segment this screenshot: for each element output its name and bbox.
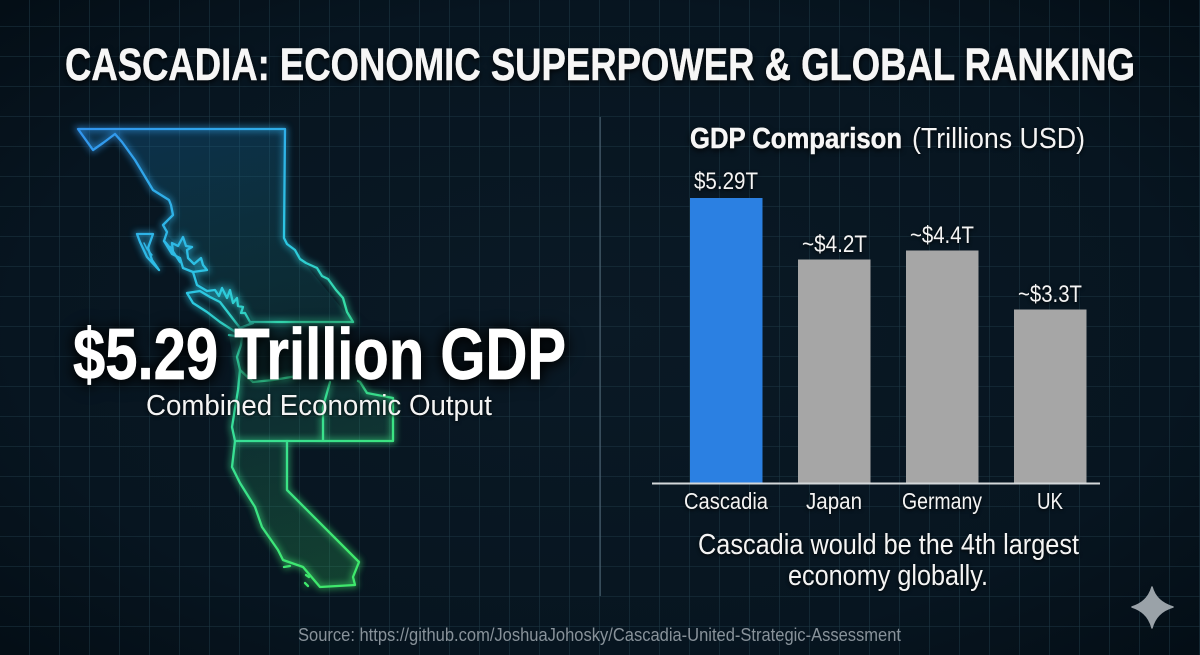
label: UK: UK [1037,488,1064,514]
divider [600,117,601,596]
chart takeaway: Cascadia would be the 4th largest [698,529,1079,561]
bar: Germany [906,250,978,483]
label: Japan: Japan [806,488,862,514]
chart heading: (Trillions USD) [912,123,1085,155]
map fill: British Columbia [78,129,353,322]
map fill: Washington, Oregon and Idaho [229,323,393,440]
bar chart: GDP comparison [652,168,1100,514]
bar: Cascadia [690,198,762,483]
map fill: California [232,441,359,587]
headline stat: $5.29 Trillion GDP [73,315,566,395]
label: Cascadia: Cascadia [684,488,768,514]
map glow [78,129,393,587]
value: Japan: ~$4.2T [802,231,867,258]
chart heading [690,123,1085,155]
value: UK: ~$3.3T [1018,281,1082,308]
map: Cascadia region outline [78,129,393,587]
chart heading: GDP Comparison [690,123,902,155]
bar: UK [1014,310,1086,483]
label: Germany: Germany [902,488,982,514]
source line: Source: https://github.com/JoshuaJohosky/Cascadia-United-Strategic-Assessment [298,625,901,645]
icon: sparkle [1132,587,1173,628]
value: Cascadia: $5.29T [694,168,758,195]
headline subtitle: Combined Economic Output [146,390,492,422]
value: Germany: ~$4.4T [910,222,974,249]
bar: Japan [798,260,870,483]
chart takeaway [698,529,1079,592]
axis line [652,482,1100,484]
chart takeaway: economy globally. [788,560,988,592]
map outline [78,129,393,587]
